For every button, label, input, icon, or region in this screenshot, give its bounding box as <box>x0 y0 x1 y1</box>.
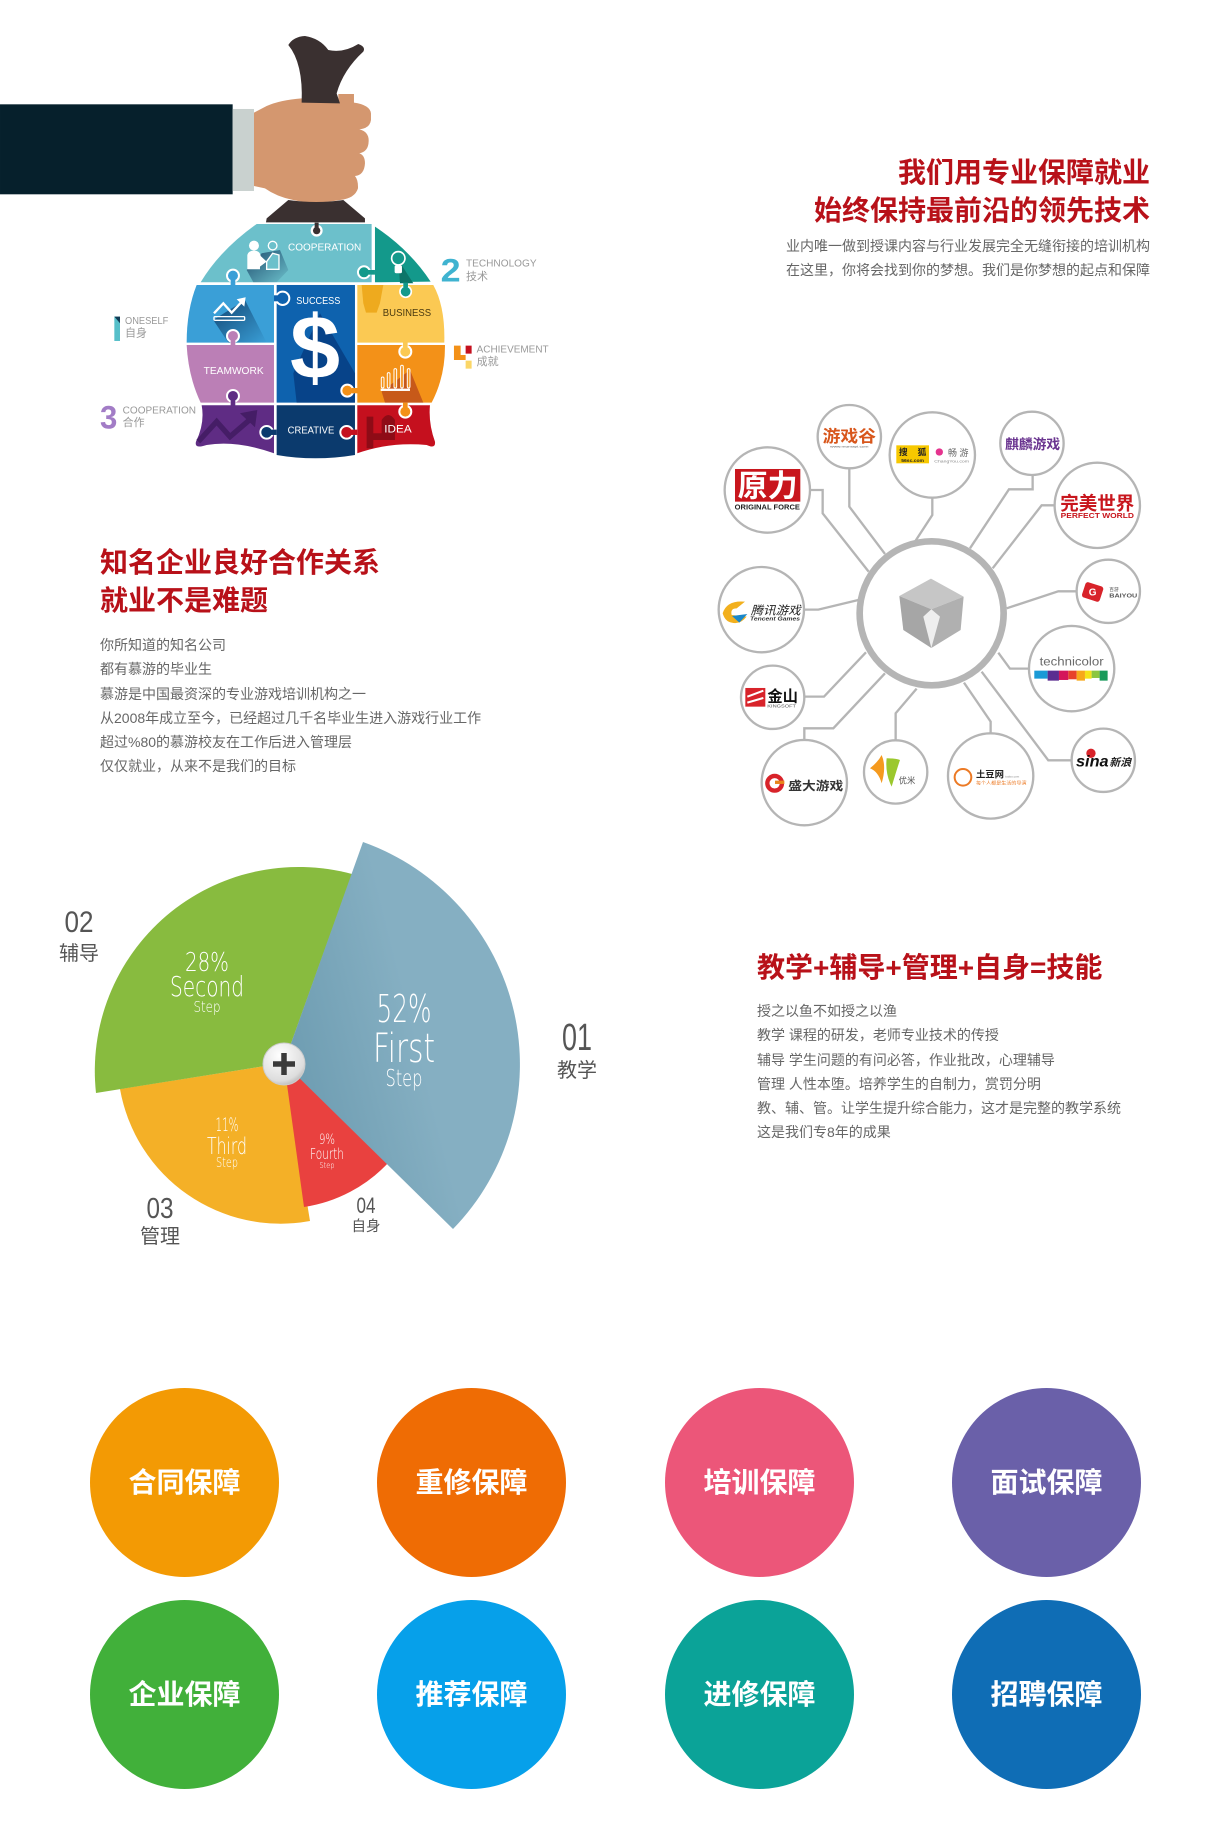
puzzle: cooperation piece <box>201 223 372 282</box>
logo: Baiyou: G <box>1089 587 1097 598</box>
slice labels: second <box>170 948 244 1016</box>
outer label: 04 self <box>352 1193 380 1235</box>
outer label: 03 management: 管理 <box>140 1225 180 1248</box>
slice: second step <box>95 867 352 1093</box>
badge: interview guarantee <box>952 1388 1141 1577</box>
outer label: 01 teaching: 01 <box>562 1017 592 1059</box>
label: cooperation: 3 <box>100 400 117 436</box>
text: skill formula body: 教学 课程的研发，老师专业技术的传授 <box>757 1027 999 1043</box>
badge: advanced study guarantee <box>665 1600 854 1789</box>
logo: Original Force: 原力 <box>738 470 798 504</box>
puzzle: business piece: BUSINESS <box>383 308 431 319</box>
logo: Baiyou: BAIYOU <box>1109 593 1137 599</box>
outer label: 01 teaching: 教学 <box>557 1059 597 1082</box>
logo: Perfect World: PERFECT WORLD <box>1061 513 1134 520</box>
puzzle: creative piece <box>260 405 355 458</box>
logo: Baiyou: 百游 <box>1109 586 1119 593</box>
label: cooperation <box>100 400 196 436</box>
slice labels: second: Second <box>170 970 244 1003</box>
heading: professional guarantee <box>814 157 1150 226</box>
logo: Shanda games: 盛大游戏 <box>788 778 843 793</box>
slice labels: fourth: Fourth <box>310 1145 344 1163</box>
logo: Technicolor <box>1029 626 1114 711</box>
heading: professional guarantee: 我们用专业保障就业 <box>898 157 1150 188</box>
slice labels: second: 28% <box>185 948 229 978</box>
label: oneself: 自身 <box>125 326 147 340</box>
label: technology: TECHNOLOGY <box>466 259 537 270</box>
logo: Sohu Changyou: 畅 游 <box>948 447 968 458</box>
slice labels: fourth: 9% <box>319 1132 335 1148</box>
slice labels: fourth <box>310 1132 344 1170</box>
text: skill formula body: 这是我们专8年的成果 <box>757 1124 891 1140</box>
slice labels: third: Step <box>216 1156 238 1171</box>
diagram: partner company network <box>718 404 1142 826</box>
outer label: 04 self: 04 <box>356 1193 376 1218</box>
puzzle: technology piece <box>358 227 431 283</box>
outer label: 02 tutoring: 02 <box>64 906 94 939</box>
puzzle: success piece with dollar sign <box>274 285 355 403</box>
text: professional guarantee body: 在这里，你将会找到你的梦想。我们是你梦想的起点和保障 <box>786 262 1150 278</box>
text: partner companies body: 慕游是中国最资深的专业游戏培训机构之一 <box>100 686 366 702</box>
heading: partner companies <box>100 547 380 616</box>
badge: contract guarantee <box>90 1388 279 1577</box>
logo: Shanda games <box>762 740 847 825</box>
outer label: 02 tutoring: 辅导 <box>59 942 99 965</box>
outer label: 03 management <box>140 1193 180 1248</box>
badge: retake guarantee <box>377 1388 566 1577</box>
label: oneself: ONESELF <box>125 316 168 327</box>
text: skill formula body: 教、辅、管。让学生提升综合能力，这才是完整的教学系统 <box>757 1100 1121 1116</box>
logo: Baiyou <box>1077 560 1140 623</box>
logo: Sina <box>1072 729 1135 792</box>
heading: professional guarantee: 始终保持最前沿的领先技术 <box>814 194 1150 226</box>
slice: fourth step <box>284 1063 389 1207</box>
outer label: 04 self: 自身 <box>352 1218 380 1235</box>
logo: Tudou: 土豆网 <box>976 768 1004 779</box>
logo: game valley: www.mumayi.com <box>830 445 869 449</box>
puzzle: teamwork piece <box>187 330 274 403</box>
text: partner companies body: 都有慕游的毕业生 <box>100 661 212 677</box>
text: partner companies body: 仅仅就业，从来不是我们的目标 <box>100 758 296 774</box>
text: partner companies body: 从2008年成立至今，已经超过几千名毕业生进入游戏行业工作 <box>100 710 481 726</box>
logo: Perfect World: 完美世界 <box>1060 493 1135 514</box>
text: partner companies body: 你所知道的知名公司 <box>100 637 226 653</box>
badge: enterprise guarantee: 企业保障 <box>128 1679 240 1710</box>
logo: Qilin games: 麒麟游戏 <box>1005 436 1060 452</box>
badge: training guarantee: 培训保障 <box>703 1467 816 1498</box>
logo: game valley <box>818 405 881 468</box>
center plus button <box>263 1043 305 1085</box>
logo: Sohu Changyou <box>890 412 975 498</box>
puzzle: cooperation piece: COOPERATION <box>288 243 361 254</box>
icon: bag neck <box>288 36 364 103</box>
text: skill formula body: 管理 人性本堕。培养学生的自制力，赏罚分明 <box>757 1076 1041 1092</box>
label: achievement: 成就 <box>477 354 499 368</box>
puzzle: purple arrow piece <box>196 390 274 453</box>
badge: recruitment guarantee: 招聘保障 <box>990 1679 1102 1710</box>
badge: advanced study guarantee: 进修保障 <box>703 1679 816 1710</box>
logo: Sina: 新浪 <box>1109 756 1133 769</box>
connectors <box>804 468 1077 760</box>
slice: third step <box>120 1063 310 1224</box>
slice labels: third <box>207 1114 247 1171</box>
puzzle: success piece with dollar sign: SUCCESS <box>296 296 340 307</box>
text: partner companies body: 超过%80的慕游校友在工作后进入管理层 <box>100 734 352 750</box>
label: cooperation: 合作 <box>123 415 145 429</box>
logo: Tencent games: Tencent Games <box>750 617 800 623</box>
logo: Kingsoft: 金山 <box>767 687 798 705</box>
badge: recruitment guarantee <box>952 1600 1141 1789</box>
badge: interview guarantee: 面试保障 <box>990 1467 1102 1498</box>
puzzle: teamwork piece: TEAMWORK <box>204 366 264 377</box>
slice labels: first: Step <box>386 1066 422 1092</box>
slice labels: fourth: Step <box>320 1161 334 1170</box>
label: technology: 2 <box>441 253 461 289</box>
text: professional guarantee body: 业内唯一做到授课内容与行业发展完全无缝衔接的培训机构 <box>786 238 1150 254</box>
puzzle: business piece <box>357 283 444 343</box>
logo: Sohu Changyou: ChangYou.com <box>934 459 970 464</box>
logo: Original Force <box>725 447 810 533</box>
icon: bag collar <box>266 200 365 222</box>
outer label: 01 teaching <box>557 1017 597 1082</box>
slice labels: third: 11% <box>216 1114 238 1136</box>
badge: referral guarantee: 推荐保障 <box>415 1679 528 1710</box>
logo: Sina: sina <box>1076 754 1109 771</box>
slice: first step <box>284 842 520 1229</box>
logo: Tudou: 每个人都是生活的导演 <box>976 780 1027 787</box>
text: skill formula body <box>757 1003 1121 1140</box>
badge: retake guarantee: 重修保障 <box>415 1467 528 1498</box>
logo: Kingsoft: KINGSOFT <box>767 704 796 710</box>
slice labels: second: Step <box>194 998 220 1016</box>
logo: Youmi: 优米 <box>899 775 916 785</box>
text: skill formula body: 辅导 学生问题的有问必答，作业批改，心理辅导 <box>757 1052 1055 1068</box>
icon: jacket sleeve <box>0 104 233 194</box>
label: technology <box>441 253 537 289</box>
logo: Technicolor: technicolor <box>1040 654 1104 668</box>
icon: shirt cuff <box>233 109 254 191</box>
central hub <box>860 541 1004 685</box>
puzzle: idea piece <box>340 403 435 453</box>
logo: Sohu Changyou: 搜 狐 <box>899 446 927 457</box>
logo: Perfect World <box>1055 463 1140 548</box>
label: achievement: ACHIEVEMENT <box>477 345 549 356</box>
logo: Qilin games <box>1000 412 1064 475</box>
logo: Kingsoft <box>741 666 804 729</box>
logo: Sohu Changyou: 56sc.com <box>901 458 925 464</box>
logo: Tencent games: 腾讯游戏 <box>751 604 803 618</box>
badge: referral guarantee <box>377 1600 566 1789</box>
outer label: 03 management: 03 <box>146 1193 174 1225</box>
badge: training guarantee <box>665 1388 854 1577</box>
puzzle: success piece with dollar sign: $ <box>290 298 340 398</box>
logo: Tencent games <box>719 567 804 652</box>
label: achievement <box>454 345 549 369</box>
icon: fist <box>254 94 371 202</box>
illustration: hand holding puzzle money bag <box>0 36 549 458</box>
slice labels: third: Third <box>207 1134 247 1160</box>
badge: enterprise guarantee <box>90 1600 279 1789</box>
logo: game valley: 游戏谷 <box>823 426 876 446</box>
label: cooperation: COOPERATION <box>123 405 196 416</box>
slice labels: first: 52% <box>376 987 432 1031</box>
badge: contract guarantee: 合同保障 <box>128 1467 240 1498</box>
puzzle: achievement piece <box>341 342 445 403</box>
logo: Original Force: ORIGINAL FORCE <box>735 502 800 511</box>
label: oneself <box>114 316 168 341</box>
puzzle: creative piece: CREATIVE <box>288 425 335 436</box>
slice labels: first: First <box>373 1026 435 1072</box>
logo: Youmi <box>864 740 927 804</box>
text: partner companies body <box>100 637 481 774</box>
slice labels: first <box>373 987 435 1092</box>
pie chart <box>59 842 597 1248</box>
logo: Tudou: tudou.com <box>1005 774 1020 778</box>
logo: Tudou <box>948 733 1033 819</box>
label: technology: 技术 <box>466 270 488 283</box>
heading: partner companies: 知名企业良好合作关系 <box>100 547 380 578</box>
text: skill formula body: 授之以鱼不如授之以渔 <box>757 1003 897 1019</box>
puzzle: growth chart piece <box>187 270 274 343</box>
text: professional guarantee body <box>786 238 1150 278</box>
heading: skill formula: 教学+辅导+管理+自身=技能 <box>757 952 1102 983</box>
puzzle: idea piece: IDEA <box>384 423 413 435</box>
outer label: 02 tutoring <box>59 906 99 965</box>
heading: partner companies: 就业不是难题 <box>100 584 268 616</box>
